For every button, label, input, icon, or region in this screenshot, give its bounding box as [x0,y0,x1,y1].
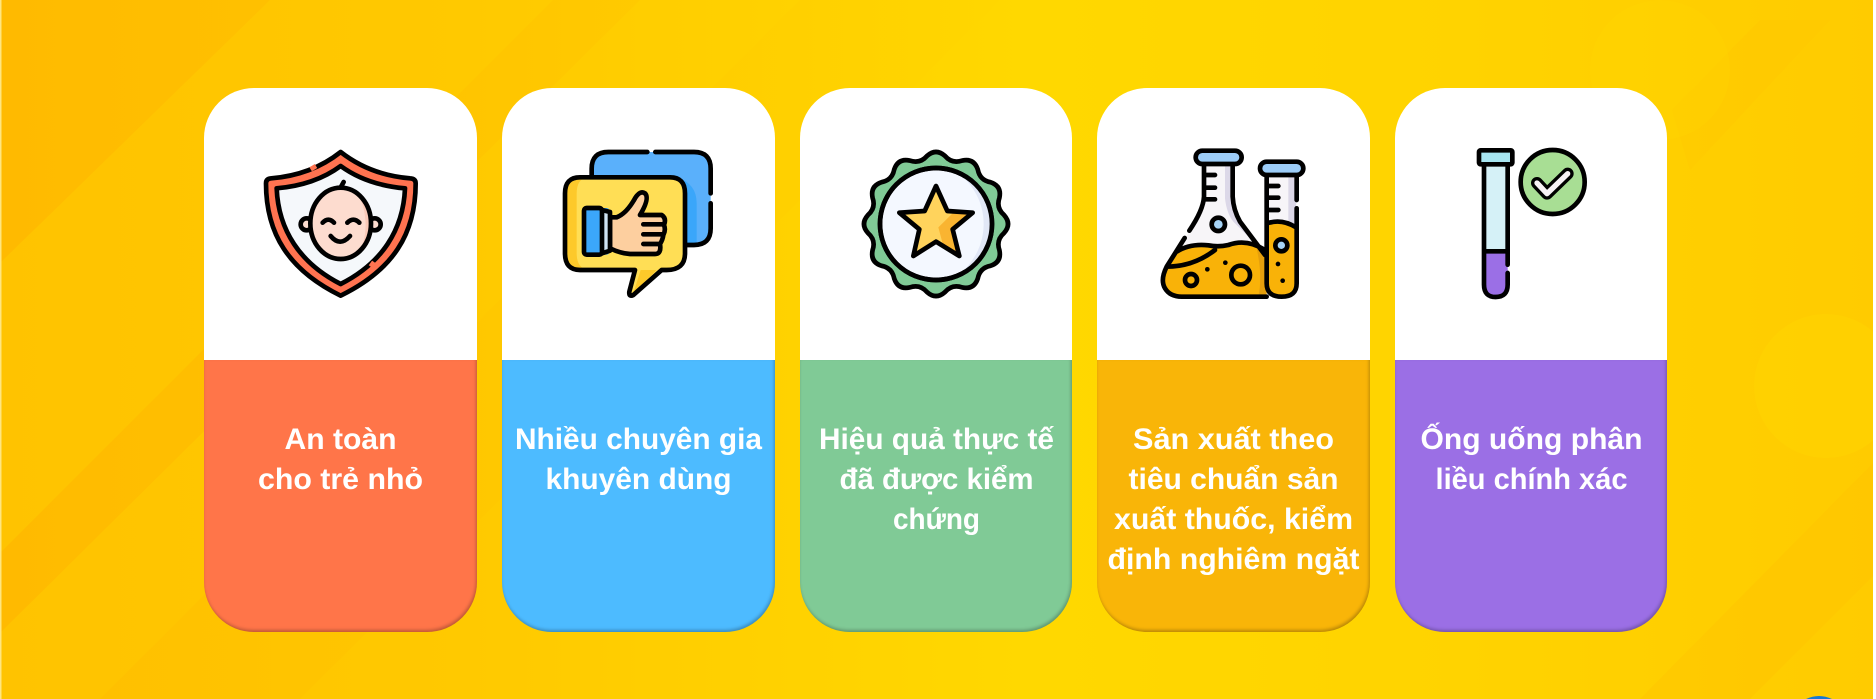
caption: san xuat theo tieu chuan [1108,423,1360,576]
panel top with shield icon [204,88,476,360]
panel top with thumbs-up icon [502,88,774,360]
icon: baby shield [264,150,418,298]
caption: hieu qua thuc te: chứng [892,503,980,536]
caption: an toan: cho trẻ nhỏ [258,463,423,496]
icon: star badge [862,150,1010,298]
caption: nhieu chuyen gia [515,423,762,496]
panel: hieu qua [800,88,1072,632]
caption: ong uong phan lieu [1420,422,1642,496]
caption: nhieu chuyen gia: Nhiều chuyên gia [515,423,762,456]
caption: hieu qua thuc te: đã được kiểm [839,463,1033,496]
caption: san xuat theo tieu chuan: tiêu chuẩn sản [1128,463,1338,496]
panel top with tube icon [1394,88,1667,360]
panel: ong uong [1395,88,1667,632]
caption: an toan: An toàn [284,423,396,456]
icon: flask and test tube [1160,148,1306,299]
caption: hieu qua thuc te: Hiệu quả thực tế [818,423,1054,456]
panel: chuyen gia [502,88,775,632]
caption: san xuat theo tieu chuan: định nghiêm ngặt [1108,543,1360,576]
panel bottom with caption [1394,360,1667,632]
caption: nhieu chuyen gia: khuyên dùng [546,463,732,496]
panel bottom with caption [502,360,774,632]
panel bottom with caption [204,360,476,632]
caption: san xuat theo tieu chuan: xuất thuốc, kiểm [1114,503,1353,536]
panel top with flask icon [1097,88,1370,360]
caption: an toan [258,423,423,496]
caption: san xuat theo tieu chuan: Sản xuất theo [1133,423,1334,456]
panel: san xuat [1097,88,1370,632]
icon: thumbs up speech bubbles [562,150,713,298]
panel bottom with caption [1097,360,1370,632]
panel: an toan [204,88,477,632]
icon: test tube with check mark [1476,148,1587,300]
caption: ong uong phan lieu: liều chính xác [1435,463,1627,496]
caption: ong uong phan lieu: Ống uống phân [1420,422,1642,456]
panel bottom with caption [800,360,1072,632]
caption: hieu qua thuc te [818,423,1054,536]
panel top with badge icon [800,88,1072,360]
